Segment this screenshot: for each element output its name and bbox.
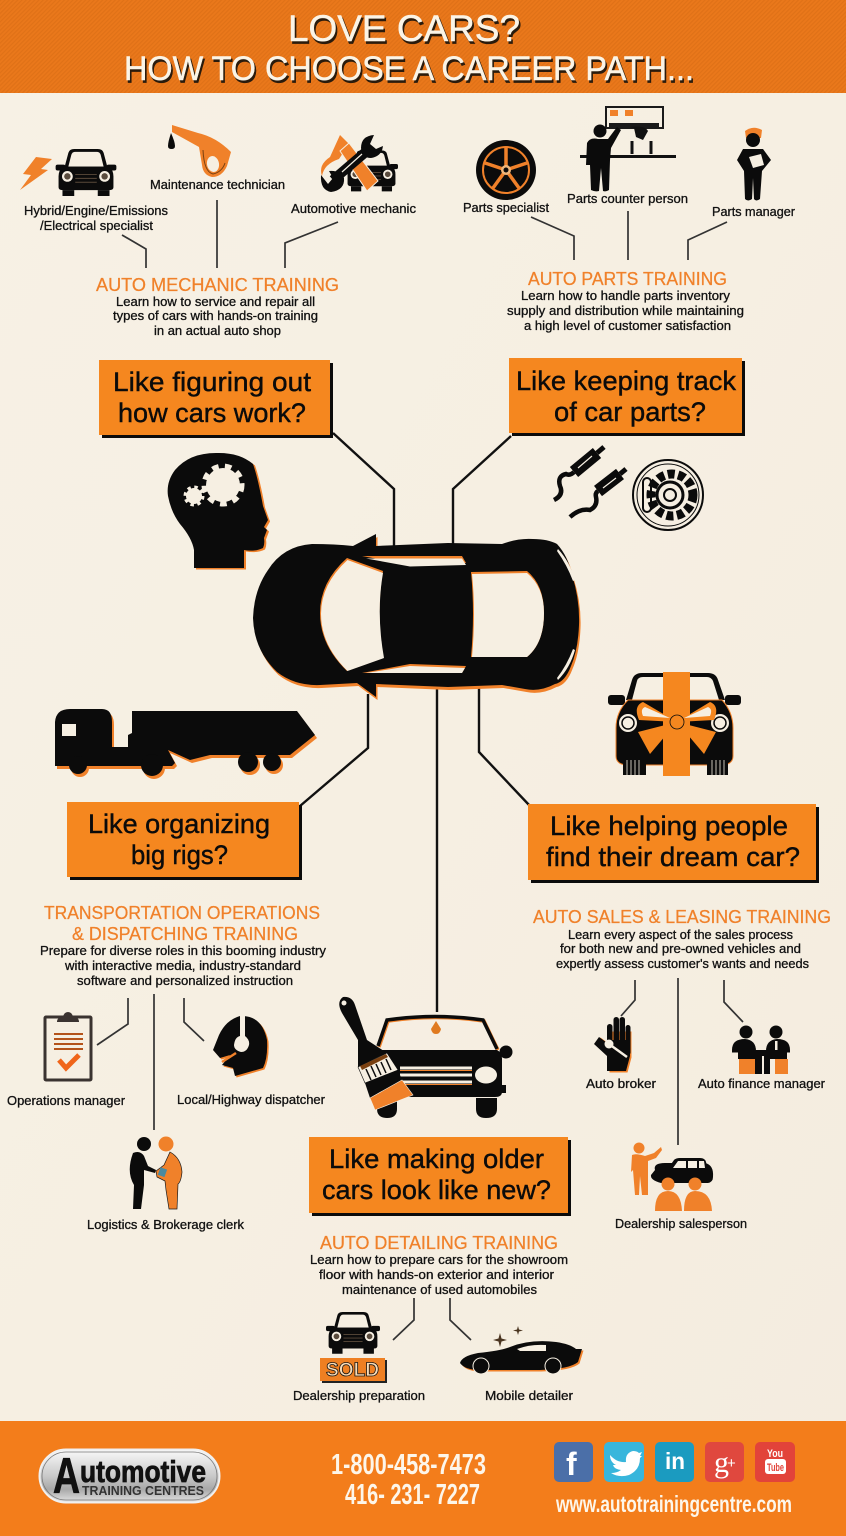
heading: auto parts training: AUTO PARTS TRAINING	[528, 269, 727, 289]
connectors: detailing	[393, 1298, 471, 1340]
heading: auto detailing training: AUTO DETAILING TRAINING	[320, 1233, 558, 1253]
heading: transportation training: & DISPATCHING TRAINING	[72, 924, 298, 944]
text: sales description: for both new and pre-owned vehicles and	[560, 942, 801, 956]
label: auto finance manager: Auto finance manager	[698, 1077, 825, 1091]
icon: twitter	[604, 1442, 644, 1482]
heading: auto mechanic training: AUTO MECHANIC TRAINING	[96, 275, 339, 295]
icon: facebook	[554, 1442, 593, 1482]
icon: fuel nozzle	[168, 125, 231, 177]
text: auto mechanic description: types of cars with hands-on training	[113, 309, 318, 323]
heading: transportation training: TRANSPORTATION OPERATIONS	[44, 903, 320, 923]
icon: sold car: SOLD	[326, 1360, 379, 1381]
text: transportation description: with interactive media, industry-standard	[64, 959, 301, 973]
text: auto parts description: a high level of customer satisfaction	[524, 319, 731, 333]
label: operations manager: Operations manager	[7, 1094, 125, 1108]
icon: linkedin: in	[665, 1448, 685, 1474]
question box: car parts: of car parts?	[554, 397, 706, 427]
icon: hybrid car with lightning	[20, 149, 116, 196]
connectors: central hub	[300, 433, 530, 1012]
icon: car with gift bow	[608, 672, 741, 776]
text: auto mechanic description	[113, 295, 318, 338]
text: detailing description	[310, 1253, 568, 1297]
icon: google plus: g	[714, 1446, 729, 1479]
icon: truck	[55, 709, 317, 779]
icon: google plus	[705, 1442, 744, 1482]
question box: car parts: Like keeping track	[516, 366, 737, 396]
icon: parts manager	[737, 128, 771, 200]
central car top view	[253, 534, 581, 700]
question box: car parts	[509, 358, 745, 436]
text: auto mechanic description: Learn how to service and repair all	[116, 295, 315, 309]
icon: facebook: f	[566, 1446, 577, 1482]
icon: wheel	[476, 140, 536, 200]
question box: how cars work: Like figuring out	[113, 367, 312, 397]
icon: clipboard	[45, 1012, 91, 1080]
icon: hand with key	[594, 1017, 632, 1072]
text: auto parts description: supply and distribution while maintaining	[507, 304, 744, 318]
question box: big rigs: big rigs?	[131, 840, 228, 870]
connectors: auto mechanic	[122, 200, 338, 268]
footer band	[0, 1421, 846, 1536]
label: hybrid specialist: /Electrical specialist	[40, 219, 154, 233]
icon: sold car	[320, 1312, 387, 1383]
question box: older cars: Like making older	[329, 1144, 544, 1174]
text: detailing description: maintenance of used automobiles	[342, 1283, 537, 1297]
text: auto mechanic description: in an actual auto shop	[154, 324, 281, 338]
label: maintenance technician: Maintenance technician	[150, 178, 285, 192]
label: parts manager: Parts manager	[712, 205, 795, 219]
label: dealership preparation: Dealership preparation	[293, 1389, 425, 1403]
logo: automotive training centres: A	[53, 1448, 80, 1504]
question box: dream car	[528, 804, 819, 883]
question box: older cars	[309, 1137, 571, 1216]
question box: dream car: Like helping people	[550, 811, 788, 841]
text: detailing description: floor with hands-on exterior and interior	[319, 1268, 554, 1282]
label: parts counter person: Parts counter person	[567, 192, 688, 206]
icon: youtube: You	[767, 1448, 783, 1460]
question box: how cars work	[99, 360, 333, 438]
icon: sports car with sparkles	[460, 1326, 584, 1374]
phone numbers: 1-800-458-7473	[331, 1449, 486, 1481]
text: detailing description: Learn how to prepare cars for the showroom	[310, 1253, 568, 1267]
logo: automotive training centres	[40, 1448, 220, 1504]
phone numbers	[331, 1449, 486, 1511]
text: sales description	[556, 928, 809, 971]
icon: mechanic car with wrench and hammer	[321, 135, 398, 192]
logo: automotive training centres: TRAINING CENTRES	[82, 1484, 204, 1498]
question box: big rigs: Like organizing	[88, 809, 270, 839]
title: LOVE CARS?	[288, 8, 520, 49]
header band	[0, 0, 846, 93]
social icons	[554, 1442, 795, 1482]
question box: dream car: find their dream car?	[546, 842, 800, 872]
connectors: auto parts	[531, 211, 727, 260]
text: auto parts description: Learn how to handle parts inventory	[521, 289, 731, 303]
icon: dealership salesperson	[631, 1142, 713, 1211]
question box: older cars: cars look like new?	[322, 1175, 551, 1205]
label: dealership salesperson: Dealership salesperson	[615, 1217, 747, 1231]
icon: youtube	[755, 1442, 795, 1482]
label: local highway dispatcher: Local/Highway dispatcher	[177, 1093, 325, 1107]
phone numbers: 416- 231- 7227	[345, 1479, 480, 1511]
icon: headset dispatcher	[213, 1015, 269, 1078]
connectors: transportation	[97, 994, 204, 1130]
icon: head with gears	[168, 453, 270, 570]
label: mobile detailer: Mobile detailer	[485, 1389, 573, 1403]
heading: sales training: AUTO SALES & LEASING TRAINING	[533, 907, 831, 927]
text: sales description: expertly assess customer's wants and needs	[556, 957, 809, 971]
label: auto broker: Auto broker	[586, 1077, 656, 1091]
icon: google plus: +	[727, 1455, 736, 1472]
label: logistics clerk: Logistics & Brokerage clerk	[87, 1218, 245, 1232]
title: HOW TO CHOOSE A CAREER PATH...	[124, 50, 694, 88]
icon: car with paint brush	[339, 997, 512, 1118]
text: sales description: Learn every aspect of the sales process	[568, 928, 793, 942]
label: parts specialist: Parts specialist	[463, 201, 550, 215]
icon: youtube: Tube	[767, 1462, 784, 1474]
text: transportation description: Prepare for diverse roles in this booming industry	[40, 944, 327, 958]
text: auto parts description	[507, 289, 744, 333]
icon: logistics handshake	[130, 1136, 182, 1209]
text: transportation description	[40, 944, 327, 988]
question box: how cars work: how cars work?	[118, 398, 306, 428]
icon: linkedin	[655, 1442, 694, 1482]
label: hybrid specialist	[24, 204, 168, 233]
icon: finance meeting	[732, 1026, 790, 1074]
text: transportation description: software and personalized instruction	[77, 974, 293, 988]
title	[124, 8, 696, 90]
connectors: sales	[621, 978, 743, 1145]
title: HOW TO CHOOSE A CAREER PATH...	[126, 52, 696, 90]
logo: automotive training centres: utomotive	[80, 1454, 206, 1489]
icon: mufflers and brake disc	[554, 447, 703, 530]
label: hybrid specialist: Hybrid/Engine/Emissions	[24, 204, 168, 218]
icon: parts counter person	[580, 107, 676, 191]
question box: big rigs	[67, 802, 302, 880]
heading: transportation training	[44, 903, 320, 944]
title: LOVE CARS?	[290, 10, 522, 52]
label: automotive mechanic: Automotive mechanic	[291, 202, 416, 216]
